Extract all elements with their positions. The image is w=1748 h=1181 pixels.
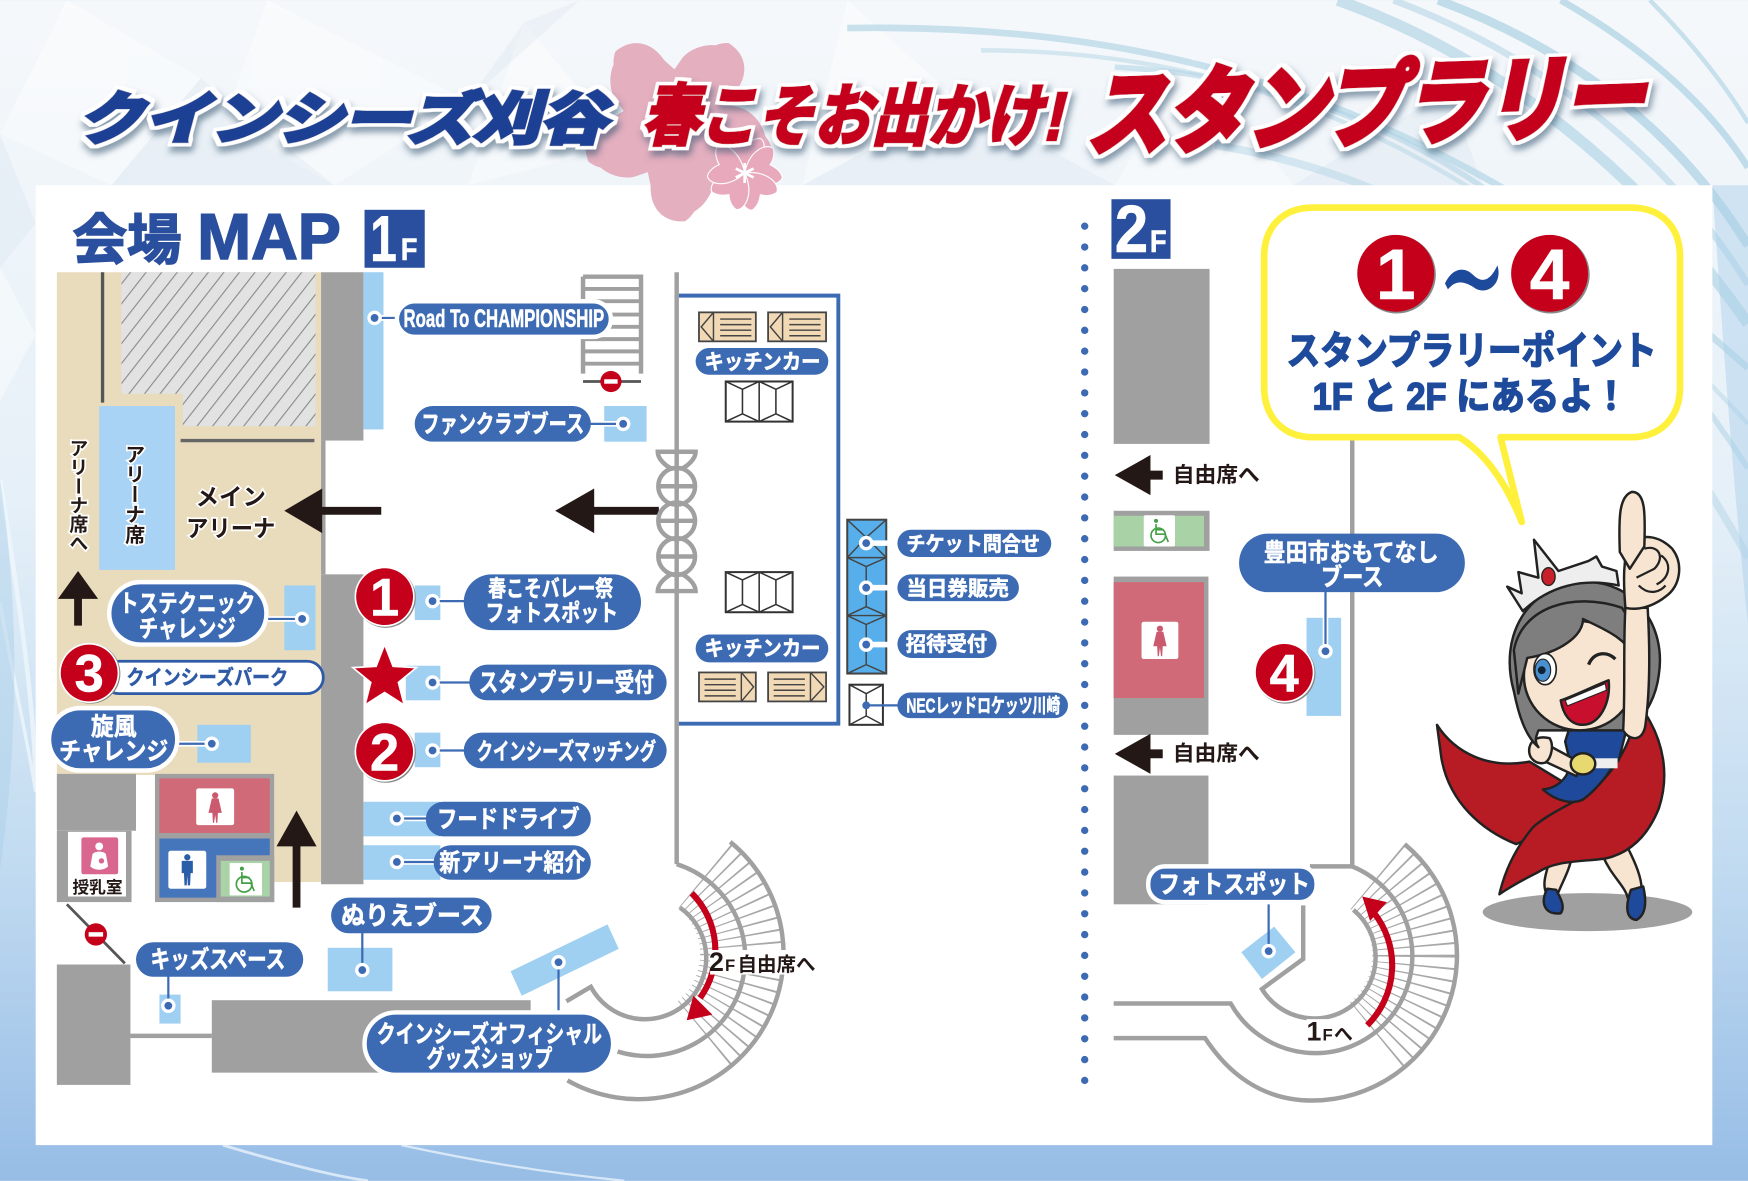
nursing room: [68, 832, 126, 897]
tent top: [726, 381, 793, 422]
label: to 1F: 1Fへ: [1307, 1016, 1353, 1046]
arrow: to main arena from gate: [555, 488, 659, 533]
label: to arena seats: アリーナ席へ: [66, 438, 88, 552]
stamp point 3: Queenseis park: 3: [75, 645, 104, 703]
corridor line 2F: [1310, 437, 1352, 866]
badge: 2F: F: [1150, 224, 1167, 259]
booth: toss technique challenge: [109, 582, 315, 650]
badge: 2F: [1111, 192, 1171, 267]
nursing room: 授乳室: [72, 878, 123, 897]
label: invitation desk: 招待受付: [906, 633, 987, 656]
arrow: to free seats upper: [1115, 455, 1260, 495]
staircase 1F: [537, 842, 784, 1099]
arrow: to free seats upper: 自由席へ: [1173, 463, 1260, 487]
label: main arena: メイン: [196, 484, 266, 510]
booth: new arena introduction: 新アリーナ紹介: [439, 849, 586, 877]
stamp point 2: Queenseis matching: クインシーズマッチング: [477, 737, 656, 764]
arena seating block: [99, 406, 175, 570]
badge: 1F: F: [401, 232, 417, 267]
restroom block: [155, 774, 274, 902]
booth: coloring: ぬりえブース: [341, 900, 484, 930]
booth: whirlwind challenge: チャレンジ: [59, 738, 168, 765]
stamp point 1: photo spot: フォトスポット: [485, 600, 618, 626]
stamp point 4: Toyota city booth: [1239, 534, 1465, 716]
booth: toss technique challenge: チャレンジ: [139, 616, 236, 643]
stamp rally reception with star: スタンプラリー受付: [479, 668, 654, 697]
stamp point 4: Toyota city booth: ブース: [1321, 562, 1383, 591]
booth: Road To Championship: [363, 272, 611, 429]
booth: toss technique challenge: トステクニック: [119, 590, 255, 618]
white map panel: [36, 185, 1712, 1145]
stamp point 2: Queenseis matching: 2: [370, 725, 399, 783]
character: mascot queen: [1437, 492, 1692, 931]
divider dots between floors: [1081, 226, 1088, 1082]
booth: Road To Championship: Road To CHAMPIONSHIP: [404, 306, 604, 333]
kitchen car area frame: [679, 296, 838, 724]
badge: 1F: [365, 202, 425, 275]
stamp point 1: photo spot: 春こそバレー祭: [488, 576, 613, 602]
stamp point 1: photo spot: [355, 567, 641, 630]
stamp point 1: photo spot: 1: [370, 570, 399, 628]
label: main arena: [186, 484, 275, 541]
arrow: to free seats lower: 自由席へ: [1173, 742, 1260, 766]
kitchen cars bottom: [696, 635, 828, 701]
label: arena seats: アリーナ席: [122, 444, 145, 544]
badge: 2F: 2: [1115, 192, 1148, 267]
speech bubble: 1: [1376, 235, 1416, 315]
booth: kids space: [136, 942, 303, 1024]
label: ticket inquiry: チケット問合せ: [906, 533, 1040, 556]
kitchen cars top: [696, 312, 828, 375]
icon: cherry blossom: [580, 39, 784, 229]
label: same day tickets: 当日券販売: [906, 578, 1009, 601]
tent bottom: [726, 572, 793, 612]
label: main arena: アリーナ: [186, 515, 275, 541]
gate chain: [658, 452, 696, 591]
label: to 2F free seats: 2F自由席へ: [709, 947, 815, 977]
booth: official goods shop: [365, 924, 619, 1075]
booth: official goods shop: グッズショップ: [426, 1044, 553, 1073]
booth: new arena introduction: [363, 845, 591, 880]
label: invitation desk: [897, 630, 997, 658]
stamp point 4: Toyota city booth: 4: [1270, 645, 1299, 703]
kitchen cars top: キッチンカー: [705, 351, 820, 374]
arrow: to main arena: [284, 488, 381, 533]
stamp point 3: Queenseis park: [59, 643, 323, 704]
title: stamp rally: スタンプラリー: [1083, 45, 1662, 167]
floor 2 block upper: [1114, 269, 1210, 444]
speech bubble: 1F と 2F にあるよ！: [1313, 376, 1628, 418]
speech bubble: スタンプラリーポイント: [1286, 331, 1657, 374]
corridor line: [675, 272, 679, 864]
booth: kids space: キッズスペース: [150, 945, 285, 974]
arrow: to free seats lower: [1115, 734, 1260, 774]
speech bubble: [1264, 208, 1680, 522]
booth: photo spot 2F: [1148, 866, 1317, 979]
badge: 1F: 1: [370, 202, 397, 275]
stamp point 3: Queenseis park: クインシーズパーク: [127, 666, 288, 690]
stamp rally reception with star: [353, 645, 667, 705]
no entry sign top: [583, 371, 641, 392]
gray walls: [57, 272, 531, 1085]
booth: coloring: [328, 898, 492, 991]
stamp point 2: Queenseis matching: [355, 721, 667, 783]
booth: NEC Red Rockets Kawasaki: NECレッドロケッツ川崎: [906, 695, 1060, 718]
heading: venue map: 会場 MAP: [72, 200, 341, 273]
title: spring outing: 春こそお出かけ!: [639, 80, 1075, 154]
stairs top: [583, 277, 641, 374]
title: team name: クインシーズ刈谷: [75, 89, 620, 151]
booth: photo spot 2F: フォトスポット: [1158, 871, 1310, 899]
booth: whirlwind challenge: 旋風: [91, 713, 137, 741]
floor 2 block lower: [1114, 776, 1208, 904]
floor plan: tan arena area: [57, 272, 321, 882]
staircase 2F: [1114, 844, 1457, 1101]
booths: ticket counters: [847, 520, 903, 674]
booth: NEC Red Rockets Kawasaki: [849, 685, 1068, 725]
no entry sign left: [67, 904, 125, 963]
stamp point 4: Toyota city booth: 豊田市おもてなし: [1264, 539, 1439, 567]
arrow: up to arena entrance: [276, 811, 317, 908]
booth: food drive: [363, 802, 591, 836]
booth: official goods shop: クインシーズオフィシャル: [377, 1020, 602, 1049]
accessible restroom 2F: [1114, 511, 1210, 551]
kitchen cars bottom: キッチンカー: [705, 638, 820, 661]
speech bubble: 4: [1530, 235, 1570, 315]
booth: fan club: ファンクラブブース: [421, 410, 584, 439]
booth: whirlwind challenge: [49, 708, 251, 771]
arrow: up to arena seats: [58, 571, 98, 626]
women's restroom 2F: [1114, 577, 1208, 735]
booth: food drive: フードドライブ: [437, 804, 580, 833]
